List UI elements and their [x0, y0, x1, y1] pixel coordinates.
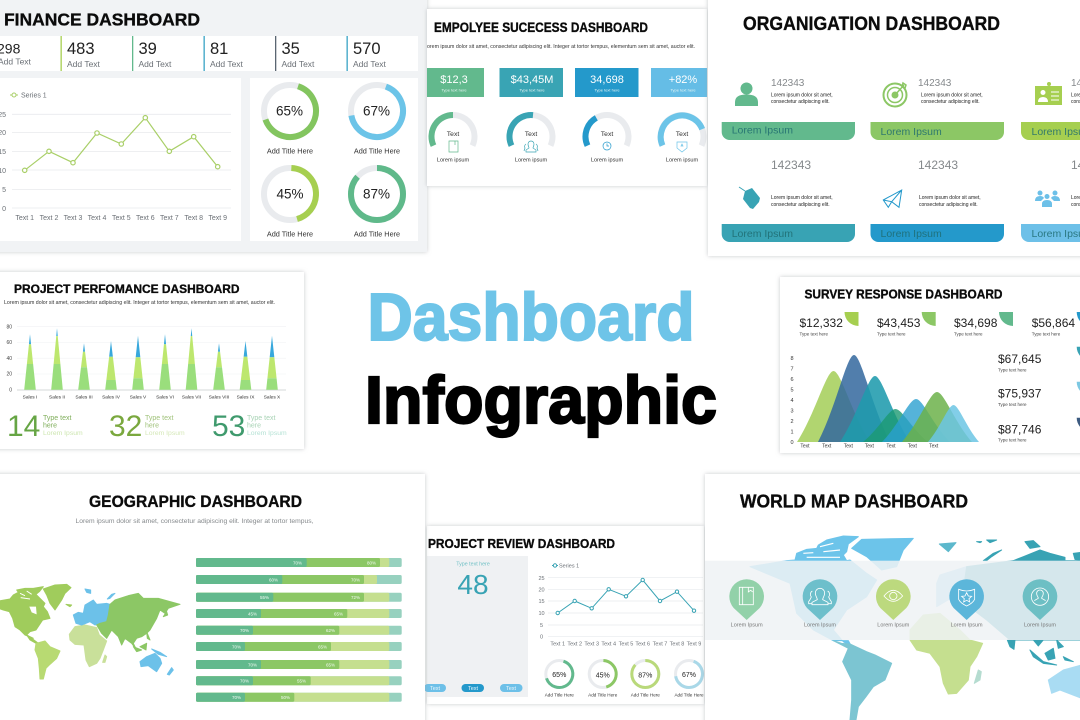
donut charts: review: 65% — [552, 672, 566, 679]
line chart: series 1 green: 0 — [2, 206, 6, 213]
org small descriptions: Lorem ipsum dolor sit amet, — [921, 92, 983, 98]
org metric numbers: 142343 — [918, 158, 958, 172]
org metric numbers: 142343 — [771, 78, 805, 89]
panel: employee success dashboard — [427, 9, 707, 186]
side card: 48 — [457, 569, 489, 600]
KPI strip: Add Text — [282, 59, 315, 69]
side card: Type text here — [456, 562, 490, 568]
survey sub labels — [800, 332, 1061, 442]
org ribbons — [722, 122, 1080, 242]
area chart: Text — [822, 444, 832, 450]
stacked progress bars: 55% — [260, 595, 269, 600]
stat: 32 — [109, 410, 185, 443]
area chart: 0 — [790, 440, 794, 446]
side card: Text — [468, 686, 479, 692]
pin: notebook — [729, 579, 764, 629]
org small descriptions: consectetur adipiscing elit. — [771, 99, 830, 105]
survey top stats: $43,453 — [877, 316, 921, 330]
donut charts: finance: 65% — [276, 104, 303, 118]
spike bar chart — [6, 324, 286, 400]
line chart: series 1 green: Text 3 — [64, 215, 82, 222]
KPI tiles: Type text here — [670, 88, 696, 92]
org metric numbers — [771, 78, 1080, 172]
donut charts: finance: 67% — [363, 104, 390, 118]
org ribbons: Lorem Ipsum — [880, 228, 942, 240]
icon: target — [884, 83, 906, 106]
line chart: series 1 green: Text 5 — [112, 215, 131, 222]
gauge labels: Text — [676, 131, 688, 138]
donut charts: finance: Add Title Here — [267, 230, 313, 238]
heading: world map: WORLD MAP DASHBOARD — [740, 490, 968, 512]
area chart: Text — [800, 444, 810, 450]
donut charts: finance: 87% — [363, 186, 390, 202]
spike bar chart: Sales VI — [156, 394, 174, 400]
spike bar chart: Sales V — [130, 394, 147, 400]
stacked progress bars: 65% — [334, 611, 343, 616]
line chart: series 1 green: Series 1 — [21, 92, 47, 100]
survey top stats: $34,698 — [954, 316, 998, 330]
heading: geographic: GEOGRAPHIC DASHBOARD — [89, 492, 302, 511]
line chart: series 1 teal: Text 5 — [619, 642, 633, 648]
stacked progress bars: 55% — [297, 679, 306, 684]
panel: project performance dashboard — [0, 272, 304, 449]
panel: geographic dashboard — [0, 474, 425, 720]
stat: 14: 14 — [7, 410, 40, 443]
donut charts: review: 45% — [596, 672, 610, 680]
KPI strip: Add Text — [353, 59, 387, 69]
spike bar chart: Sales VIII — [209, 394, 229, 400]
pin: notebook: Lorem Ipsum — [731, 623, 763, 629]
spike bar chart: 40 — [6, 356, 12, 362]
stat: 53: Type text — [247, 415, 275, 422]
stacked progress bars: 50% — [281, 695, 290, 700]
stacked progress bars — [196, 558, 402, 702]
KPI strip: Add Text — [67, 59, 101, 69]
stat: 53: here — [247, 422, 261, 430]
icon: person — [735, 82, 758, 106]
gauge labels: Text — [447, 131, 459, 138]
donut charts: review: Add Title Here — [545, 692, 574, 698]
survey top stats: $56,864 — [1032, 316, 1075, 330]
icon: price tag — [739, 187, 760, 209]
line chart: series 1 teal — [538, 564, 703, 648]
spike bar chart: Sales IV — [102, 394, 121, 400]
line chart: series 1 teal: Text 1 — [550, 642, 565, 648]
pin: user: Lorem Ipsum — [1024, 623, 1056, 629]
stacked progress bars: 72% — [351, 595, 360, 600]
stacked progress bars: 80% — [367, 560, 376, 565]
stat: 32: Type text — [145, 415, 173, 422]
survey sub labels: Type text here — [877, 332, 906, 336]
pin: shield: Lorem Ipsum — [951, 623, 983, 629]
stat: 53: 53 — [212, 410, 245, 443]
area chart: 3 — [790, 408, 794, 414]
stacked progress bars: 62% — [326, 628, 335, 633]
donut charts: finance: 45% — [276, 186, 304, 202]
stacked progress bars: 70% — [293, 560, 302, 565]
stat: 53 — [212, 410, 287, 443]
panel: world map dashboard — [705, 474, 1080, 720]
area chart: Text — [886, 444, 896, 450]
area chart: Text — [908, 444, 917, 450]
survey sub labels: Type text here — [954, 332, 983, 336]
stacked progress bars: 70% — [240, 628, 249, 633]
icon: id card — [1035, 82, 1062, 105]
line chart: series 1 teal: 10 — [538, 611, 545, 617]
area chart: Text — [844, 444, 853, 450]
main title: dashboard: Dashboard — [368, 280, 694, 355]
side card: Text — [506, 686, 517, 692]
gauge labels: Text — [525, 131, 537, 138]
survey top stats — [800, 316, 1075, 436]
stacked progress bars: 70% — [232, 695, 241, 700]
panel: project review dashboard — [424, 526, 706, 704]
donut charts: finance: Add Title Here — [267, 146, 313, 156]
line chart: series 1 teal: 5 — [540, 623, 543, 629]
line chart: series 1 green: Text 4 — [88, 215, 106, 222]
line chart: series 1 green: Text 9 — [208, 215, 227, 222]
gauge labels: Lorem ipsum — [437, 158, 469, 164]
donut charts: finance: Add Title Here — [354, 230, 400, 238]
stacked progress bars: 65% — [326, 662, 335, 667]
area chart — [790, 355, 979, 450]
area chart: 4 — [790, 398, 794, 404]
KPI strip: 483 — [67, 40, 95, 58]
line chart: series 1 green: Text 6 — [136, 215, 155, 222]
KPI tiles: +82% — [669, 74, 697, 86]
line chart: series 1 green: 5 — [2, 187, 6, 194]
spike bar chart: 60 — [6, 340, 12, 346]
survey top stats: $12,332 — [800, 316, 843, 330]
spike bar chart: Sales X — [264, 394, 281, 400]
stat: 14: here — [43, 422, 57, 430]
line chart: series 1 teal: Text 4 — [601, 642, 616, 648]
line chart: series 1 teal: Text 2 — [567, 642, 582, 648]
stacked progress bars: 70% — [240, 679, 249, 684]
area chart: 5 — [790, 388, 794, 394]
survey top stats: $87,746 — [998, 422, 1042, 436]
translucent band — [705, 561, 1080, 640]
org ribbons: Lorem Ipsum — [732, 228, 793, 240]
line chart: series 1 teal: Text 7 — [653, 642, 667, 648]
donut charts: review: 87% — [638, 672, 652, 680]
area chart: 2 — [790, 419, 794, 425]
gauge labels: Lorem ipsum — [666, 158, 698, 164]
survey sub labels: Type text here — [998, 368, 1027, 372]
KPI tiles: Type text here — [441, 88, 467, 92]
gauge labels: Lorem ipsum — [515, 158, 547, 164]
line chart: series 1 green: Text 1 — [15, 215, 34, 222]
KPI strip: 570 — [353, 40, 381, 58]
area chart: Text — [929, 444, 939, 450]
stat: 32: 32 — [109, 410, 142, 443]
KPI tiles: $12,3 — [440, 74, 468, 86]
donut charts: review: Add Title Here — [588, 692, 618, 698]
donut charts: finance: Add Title Here — [354, 146, 400, 156]
survey sub labels: Type text here — [998, 438, 1027, 442]
line chart: series 1 teal: Text 3 — [584, 642, 599, 648]
org ribbons: Lorem Ipsum — [880, 126, 942, 138]
pin: eye — [876, 579, 911, 629]
world map: background continents — [750, 536, 1080, 720]
world map: coloured continents — [0, 584, 180, 679]
survey sub labels: Type text here — [1032, 332, 1061, 336]
subtitle: geographic: Lorem ipsum dolor sit amet, consectetur adipiscing elit. Integer at tortor tempus, — [76, 518, 314, 525]
spike bar chart: 80 — [6, 324, 12, 330]
donut charts: review: 67% — [682, 672, 696, 679]
pin: user — [1023, 579, 1057, 629]
stat: 32: Lorem Ipsum — [145, 430, 185, 437]
survey top stats: $75,937 — [998, 386, 1042, 400]
donut charts: finance — [250, 78, 418, 241]
survey sub labels: Type text here — [998, 402, 1027, 407]
KPI tiles: 34,698 — [590, 74, 624, 86]
main title: infographic: Infographic — [365, 363, 717, 438]
pin: eye: Lorem Ipsum — [877, 623, 910, 629]
icon: people group — [1035, 190, 1060, 207]
gauge labels: Lorem ipsum — [591, 158, 623, 164]
stat: 14: Lorem Ipsum — [43, 430, 83, 437]
stacked progress bars: 65% — [318, 644, 327, 649]
stacked progress bars: 45% — [248, 611, 257, 616]
area chart: 8 — [790, 356, 794, 362]
gauge labels: Text — [601, 131, 613, 138]
org metric numbers: 142343 — [918, 78, 952, 89]
heading: project review: PROJECT REVIEW DASHBOARD — [428, 536, 615, 551]
spike bar chart: Sales VII — [182, 394, 201, 400]
stacked progress bars: 70% — [248, 662, 257, 667]
org small descriptions — [771, 92, 1080, 208]
org small descriptions: Lorem ipsum dolor sit amet, — [771, 92, 833, 98]
stat: 14: Type text — [43, 415, 71, 422]
KPI tiles: $43,45M — [511, 74, 553, 86]
KPI strip: 35 — [282, 40, 300, 58]
org ribbons: Lorem Ipsum — [732, 124, 793, 136]
stacked progress bars: 70% — [232, 644, 241, 649]
icon: paper plane — [883, 190, 902, 207]
pin: shield — [949, 579, 984, 629]
org small descriptions: Lorem ipsum dolor sit amet, — [919, 195, 981, 201]
org small descriptions: consectetur adipiscing elit. — [921, 99, 980, 105]
stacked progress bars: 60% — [269, 577, 278, 582]
line chart: series 1 teal: 25 — [538, 576, 545, 582]
line chart: series 1 green — [0, 78, 241, 241]
org small descriptions: consectetur adipiscing elit. — [771, 202, 830, 208]
line chart: series 1 teal: 15 — [538, 599, 545, 605]
donut charts: review: Add Title Here — [631, 692, 660, 698]
stat: 32: here — [145, 422, 159, 430]
spike bar chart: 0 — [9, 388, 12, 394]
survey sub labels: Type text here — [800, 332, 829, 336]
line chart: series 1 teal: Text 9 — [687, 642, 701, 648]
survey top stats: $67,645 — [998, 352, 1042, 366]
subtitle: performance: Lorem ipsum dolor sit amet, consectetur adipiscing elit. Integer at tortor tempus, elementum sem sit amet, auctor elit. — [4, 300, 275, 306]
line chart: series 1 green: Text 7 — [160, 215, 179, 222]
line chart: series 1 teal: Series 1 — [559, 564, 579, 570]
spike bar chart: Sales II — [49, 394, 65, 400]
side card: Text — [430, 686, 441, 692]
line chart: series 1 green: Text 8 — [184, 215, 203, 222]
heading: finance: FINANCE DASHBOARD — [4, 10, 200, 30]
stacked progress bars: 70% — [351, 577, 360, 582]
KPI strip: Add Text — [210, 59, 244, 69]
pin: people: Lorem Ipsum — [804, 623, 836, 629]
panel: survey response dashboard — [780, 277, 1080, 453]
side card — [424, 556, 528, 697]
heading: employee: EMPOLYEE SUCECESS DASHBOARD — [434, 20, 648, 35]
heading: organigation: ORGANIGATION DASHBOARD — [743, 13, 1000, 35]
area chart: Text — [865, 444, 874, 450]
line chart: series 1 teal: 0 — [540, 634, 543, 640]
KPI strip: 81 — [210, 40, 228, 58]
map pins — [729, 579, 1057, 629]
org small descriptions: Lorem ipsum dolor sit amet, — [771, 195, 833, 201]
line chart: series 1 teal: 20 — [538, 588, 545, 594]
KPI tiles: Type text here — [519, 88, 545, 92]
pin: people — [803, 579, 837, 629]
heading: project performance: PROJECT PERFOMANCE DASHBOARD — [14, 282, 240, 296]
gauge icons — [449, 141, 687, 152]
org metric numbers: 142343 — [771, 158, 811, 172]
donut charts: review: Add Title Here — [674, 692, 704, 698]
spike bar chart: Sales III — [75, 394, 93, 400]
gauge labels — [437, 131, 698, 164]
line chart: series 1 teal: Text 8 — [670, 642, 684, 648]
KPI strip: 39 — [138, 40, 157, 58]
panel: organigation dashboard — [708, 0, 1080, 256]
area chart: 7 — [790, 366, 794, 372]
area chart: 1 — [790, 430, 794, 436]
stat: 53: Lorem Ipsum — [247, 430, 287, 437]
heading: survey: SURVEY RESPONSE DASHBOARD — [804, 286, 1002, 302]
spike bar chart: Sales I — [23, 394, 37, 400]
KPI tiles: Type text here — [594, 88, 620, 92]
KPI strip: Add Text — [138, 59, 172, 69]
icon leaves — [844, 312, 1080, 432]
KPI strip — [0, 36, 418, 71]
subtitle: employee: orem ipsum dolor sit amet, consectetur adipiscing elit. Integer at tortor tempus, elementum sem sit amet, auctor elit. — [427, 44, 695, 50]
org small descriptions: consectetur adipiscing elit. — [919, 202, 978, 208]
stat: 14 — [7, 410, 83, 443]
donut charts: review — [542, 657, 706, 698]
panel: finance dashboard — [0, 0, 427, 252]
area chart: 6 — [790, 377, 794, 383]
line chart: series 1 green: Text 2 — [40, 215, 58, 222]
spike bar chart: 20 — [6, 372, 12, 378]
spike bar chart: Sales IX — [237, 394, 255, 400]
line chart: series 1 teal: Text 6 — [635, 642, 650, 648]
gauges — [431, 115, 704, 146]
KPI tiles — [427, 68, 707, 97]
